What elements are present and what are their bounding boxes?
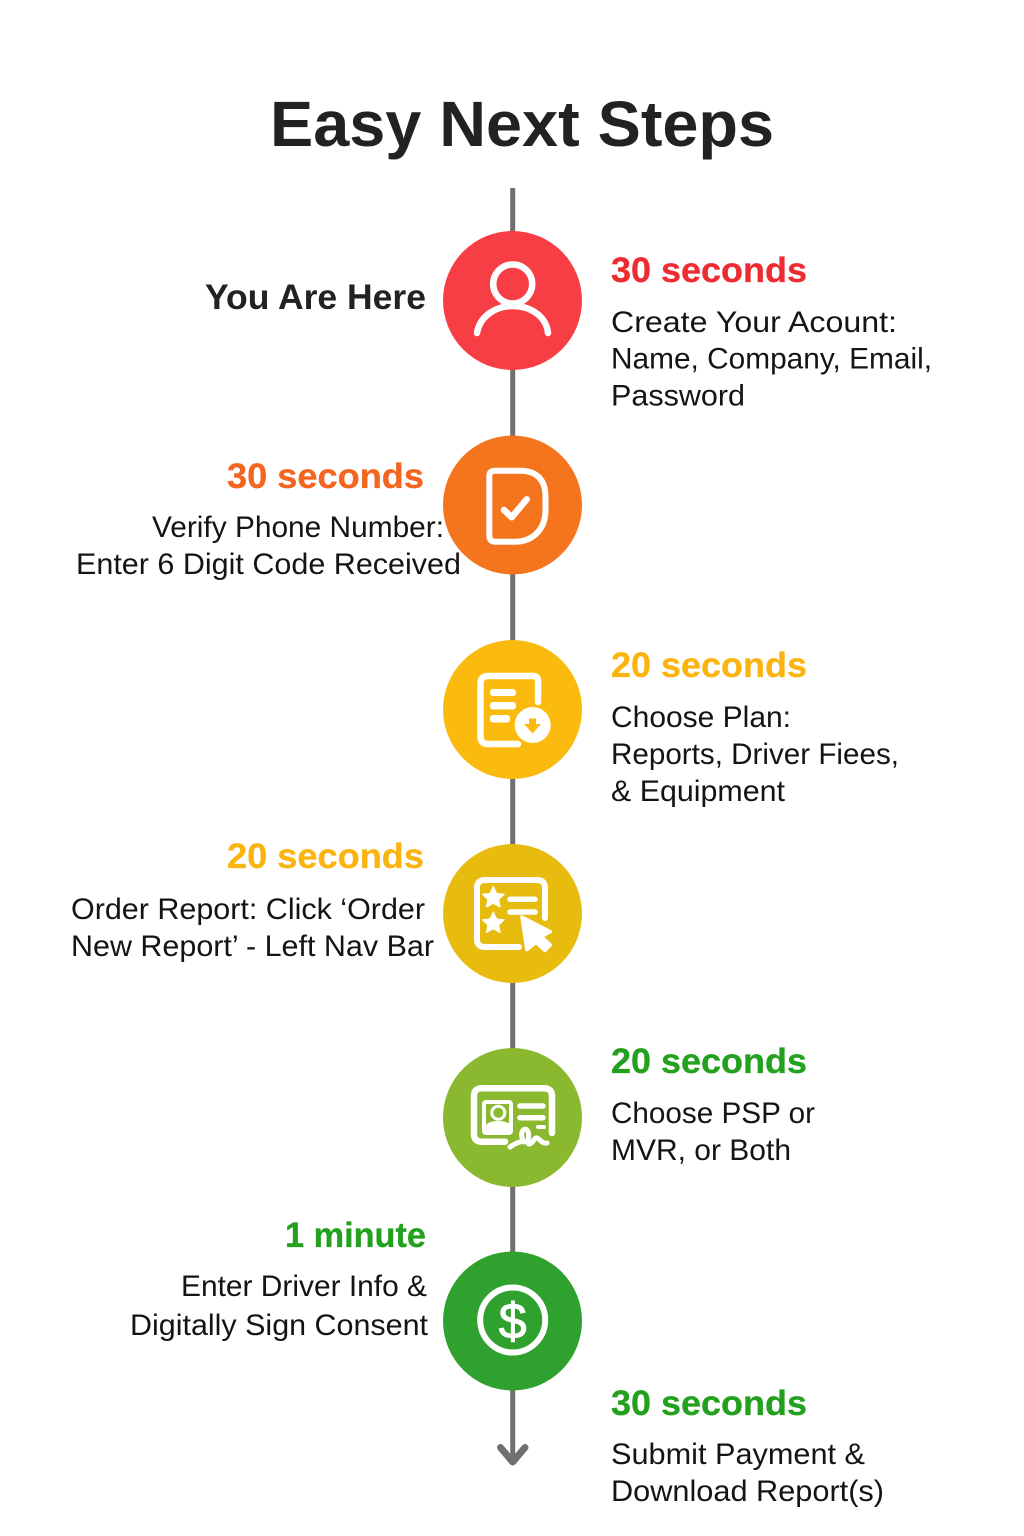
icon: document download on amber circle (443, 640, 582, 779)
step 3 description: Reports, Driver Fiees, (611, 738, 899, 771)
title: Easy Next Steps (270, 88, 774, 160)
step 7 description: Download Report(s) (611, 1475, 884, 1508)
step 6 description (130, 1270, 429, 1342)
step 2: verify phone (76, 436, 582, 581)
step 6 description: Enter Driver Info & (181, 1270, 427, 1303)
step 5 description: MVR, or Both (611, 1134, 791, 1167)
step 1 description: Password (611, 380, 745, 412)
step 6 duration: 1 minute (285, 1216, 426, 1255)
icon: dollar coin on dark green circle (443, 1252, 582, 1390)
step 4 description: New Report’ - Left Nav Bar (71, 930, 434, 963)
step 6: driver info and consent (130, 1216, 582, 1390)
icon: starred list with cursor on yellow circle (443, 844, 582, 983)
step 5 description: Choose PSP or (611, 1097, 815, 1130)
step 6 description: Digitally Sign Consent (130, 1309, 429, 1342)
icon: shield check on orange circle (443, 436, 582, 574)
step 2 duration: 30 seconds (227, 457, 424, 496)
step 3 duration: 20 seconds (611, 646, 807, 685)
step 4 description (71, 893, 434, 963)
step 5 duration: 20 seconds (611, 1042, 807, 1081)
step 1 description: Name, Company, Email, (611, 342, 932, 376)
step 3 description: & Equipment (611, 775, 786, 808)
step 3: choose plan (443, 640, 899, 808)
step 7 duration: 30 seconds (611, 1384, 807, 1423)
step 4 description: Order Report: Click ‘Order (71, 893, 425, 926)
step 7 description: Submit Payment & (611, 1438, 865, 1471)
step 2 description: Enter 6 Digit Code Received (76, 548, 461, 581)
step 1 description (611, 306, 932, 412)
icon: user on red circle (443, 231, 582, 370)
step 5: choose PSP or MVR (443, 1042, 815, 1187)
step 1 description: Create Your Acount: (611, 306, 897, 339)
you are here label: You Are Here (205, 278, 426, 317)
step 3 description: Choose Plan: (611, 701, 791, 734)
icon: ID card with signature on green circle (443, 1048, 582, 1187)
step 4: order report (71, 837, 582, 983)
step 1 duration: 30 seconds (611, 251, 807, 290)
step 2 description: Verify Phone Number: (152, 511, 444, 544)
step 7 description (611, 1438, 884, 1508)
step 4 duration: 20 seconds (227, 837, 424, 876)
step 3 description (611, 701, 899, 808)
icon: dollar coin on dark green circle: $ (499, 1293, 527, 1349)
timeline arrow (500, 188, 525, 1462)
step 2 description (76, 511, 461, 581)
step 5 description (611, 1097, 815, 1167)
step 1: create account (205, 231, 932, 412)
step 7: submit payment (611, 1384, 884, 1508)
